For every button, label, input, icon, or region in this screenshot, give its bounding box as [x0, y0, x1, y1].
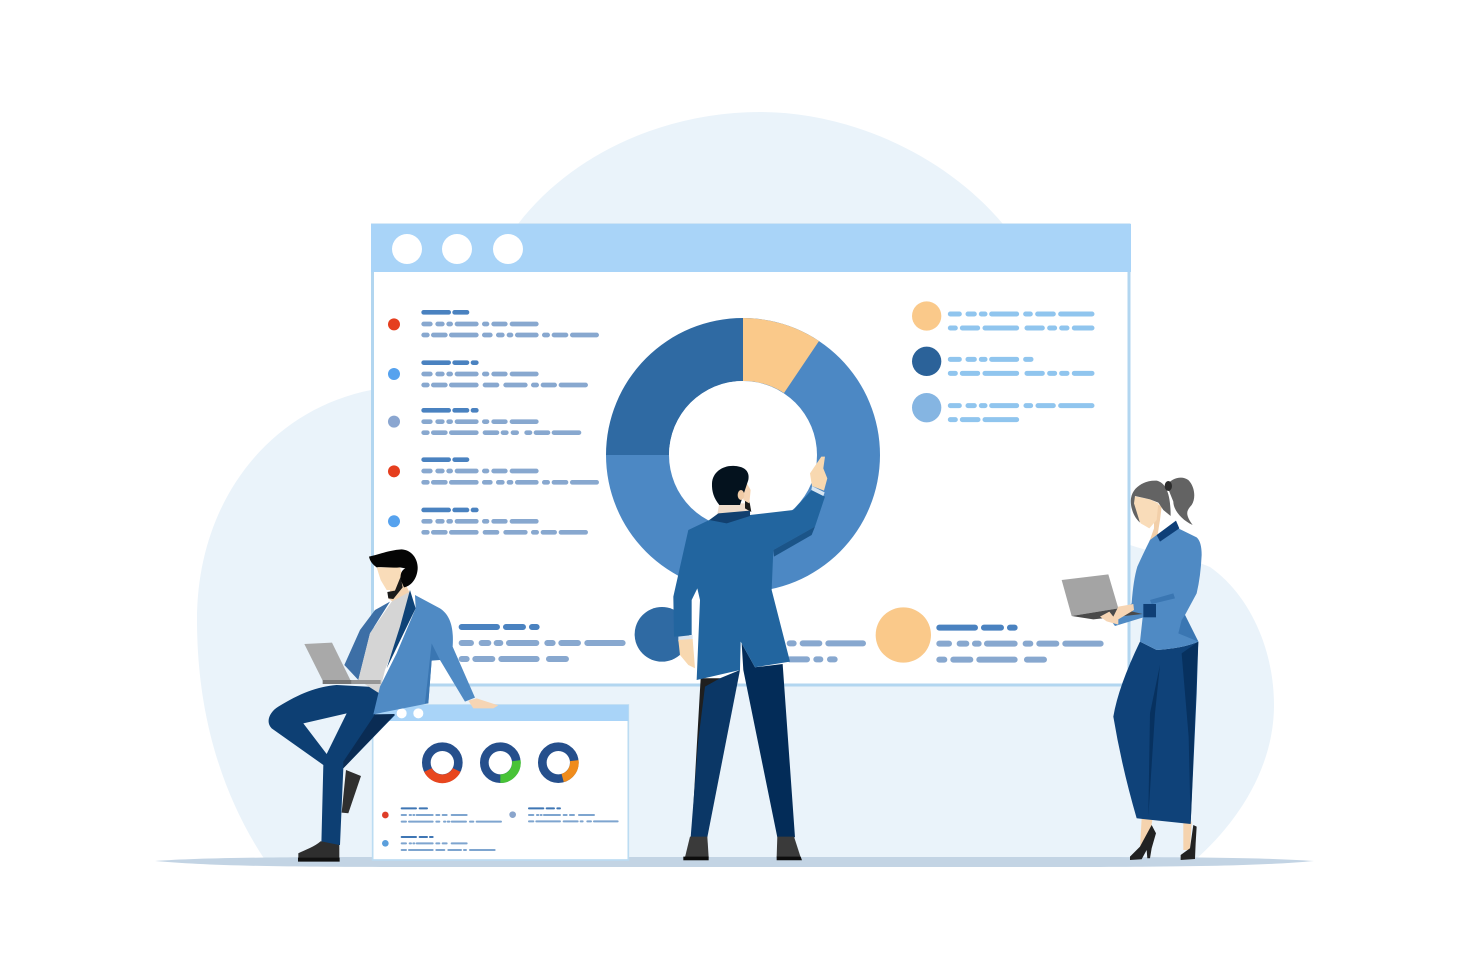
donut: red [426, 747, 458, 779]
left hand [678, 639, 695, 668]
collar [1157, 521, 1179, 542]
blouse shade [1150, 593, 1198, 642]
left trouser leg shadow [693, 678, 720, 807]
ear [738, 490, 744, 500]
trouser shade [1148, 642, 1198, 824]
face [1133, 496, 1158, 528]
window control dots [392, 234, 523, 264]
jacket [673, 490, 825, 680]
donut chart [606, 318, 880, 592]
hair tie [1165, 481, 1172, 491]
left trouser leg [691, 670, 740, 837]
face [377, 567, 403, 590]
small legend headings [402, 808, 560, 837]
dark blue circle [635, 607, 689, 662]
laptop base [1072, 608, 1143, 619]
hands [1100, 604, 1134, 625]
callout heading [462, 618, 537, 636]
right cuff [811, 486, 825, 496]
arm shadow [773, 527, 815, 557]
small legend text lines [402, 815, 618, 850]
small legend bullets [382, 811, 516, 847]
right shoe [777, 837, 801, 857]
small window dots [397, 708, 423, 718]
hand [468, 698, 498, 708]
laptop base light [352, 680, 381, 684]
right legend [912, 301, 1092, 422]
laptop screen [1062, 574, 1118, 616]
left sole [683, 857, 709, 860]
high heels [1130, 825, 1197, 860]
donut: green [484, 747, 516, 779]
laptop screen [304, 643, 351, 681]
right trouser leg [742, 643, 795, 837]
jacket [373, 595, 475, 714]
shoe sole [298, 858, 340, 862]
trouser shadow [343, 714, 395, 768]
callout text lines [790, 643, 1101, 660]
beard [387, 577, 403, 599]
trousers [1113, 642, 1198, 824]
callout heading [939, 619, 1015, 637]
main browser window [371, 224, 1131, 685]
woman with laptop [1062, 478, 1202, 860]
shoe [298, 841, 339, 858]
far sleeve [344, 602, 390, 680]
pointing hand [810, 457, 827, 491]
bottom left callout [462, 607, 689, 662]
trousers [269, 685, 395, 845]
peach circle [876, 607, 931, 663]
collar [709, 511, 750, 523]
legend bullets [388, 318, 400, 527]
forearm [1112, 603, 1145, 626]
legend colour circles [912, 301, 941, 422]
callout text lines [462, 643, 623, 659]
blouse [1132, 528, 1202, 650]
legend text lines [424, 324, 597, 532]
lapel [387, 590, 416, 668]
legend headings [424, 312, 476, 510]
face sliver [743, 480, 751, 503]
far shoe [342, 770, 361, 813]
ground shadow [155, 857, 1314, 867]
right sole [777, 857, 802, 860]
man pointing at chart [673, 457, 827, 860]
left legend list [388, 312, 597, 532]
window title bar [371, 224, 1131, 272]
beard [745, 497, 751, 512]
jacket sleeve shade [425, 643, 440, 703]
neck [717, 503, 751, 514]
left cuff [678, 635, 693, 641]
cuff [1143, 604, 1156, 617]
small window title bar [372, 705, 628, 721]
ponytail [1167, 478, 1194, 525]
hair [712, 466, 749, 505]
left shoe [685, 837, 709, 857]
lower legs [1140, 818, 1192, 850]
hair [369, 549, 418, 587]
neck [1149, 502, 1162, 542]
laptop base [323, 680, 352, 684]
small browser window [372, 705, 628, 860]
donut: orange [542, 747, 574, 779]
legend text lines [950, 314, 1092, 420]
man sitting with laptop [269, 549, 498, 862]
neck [388, 570, 410, 605]
bottom right callout [790, 607, 1101, 663]
background cloud blob [197, 112, 1274, 860]
shirt [358, 592, 410, 693]
hair [1131, 481, 1171, 523]
